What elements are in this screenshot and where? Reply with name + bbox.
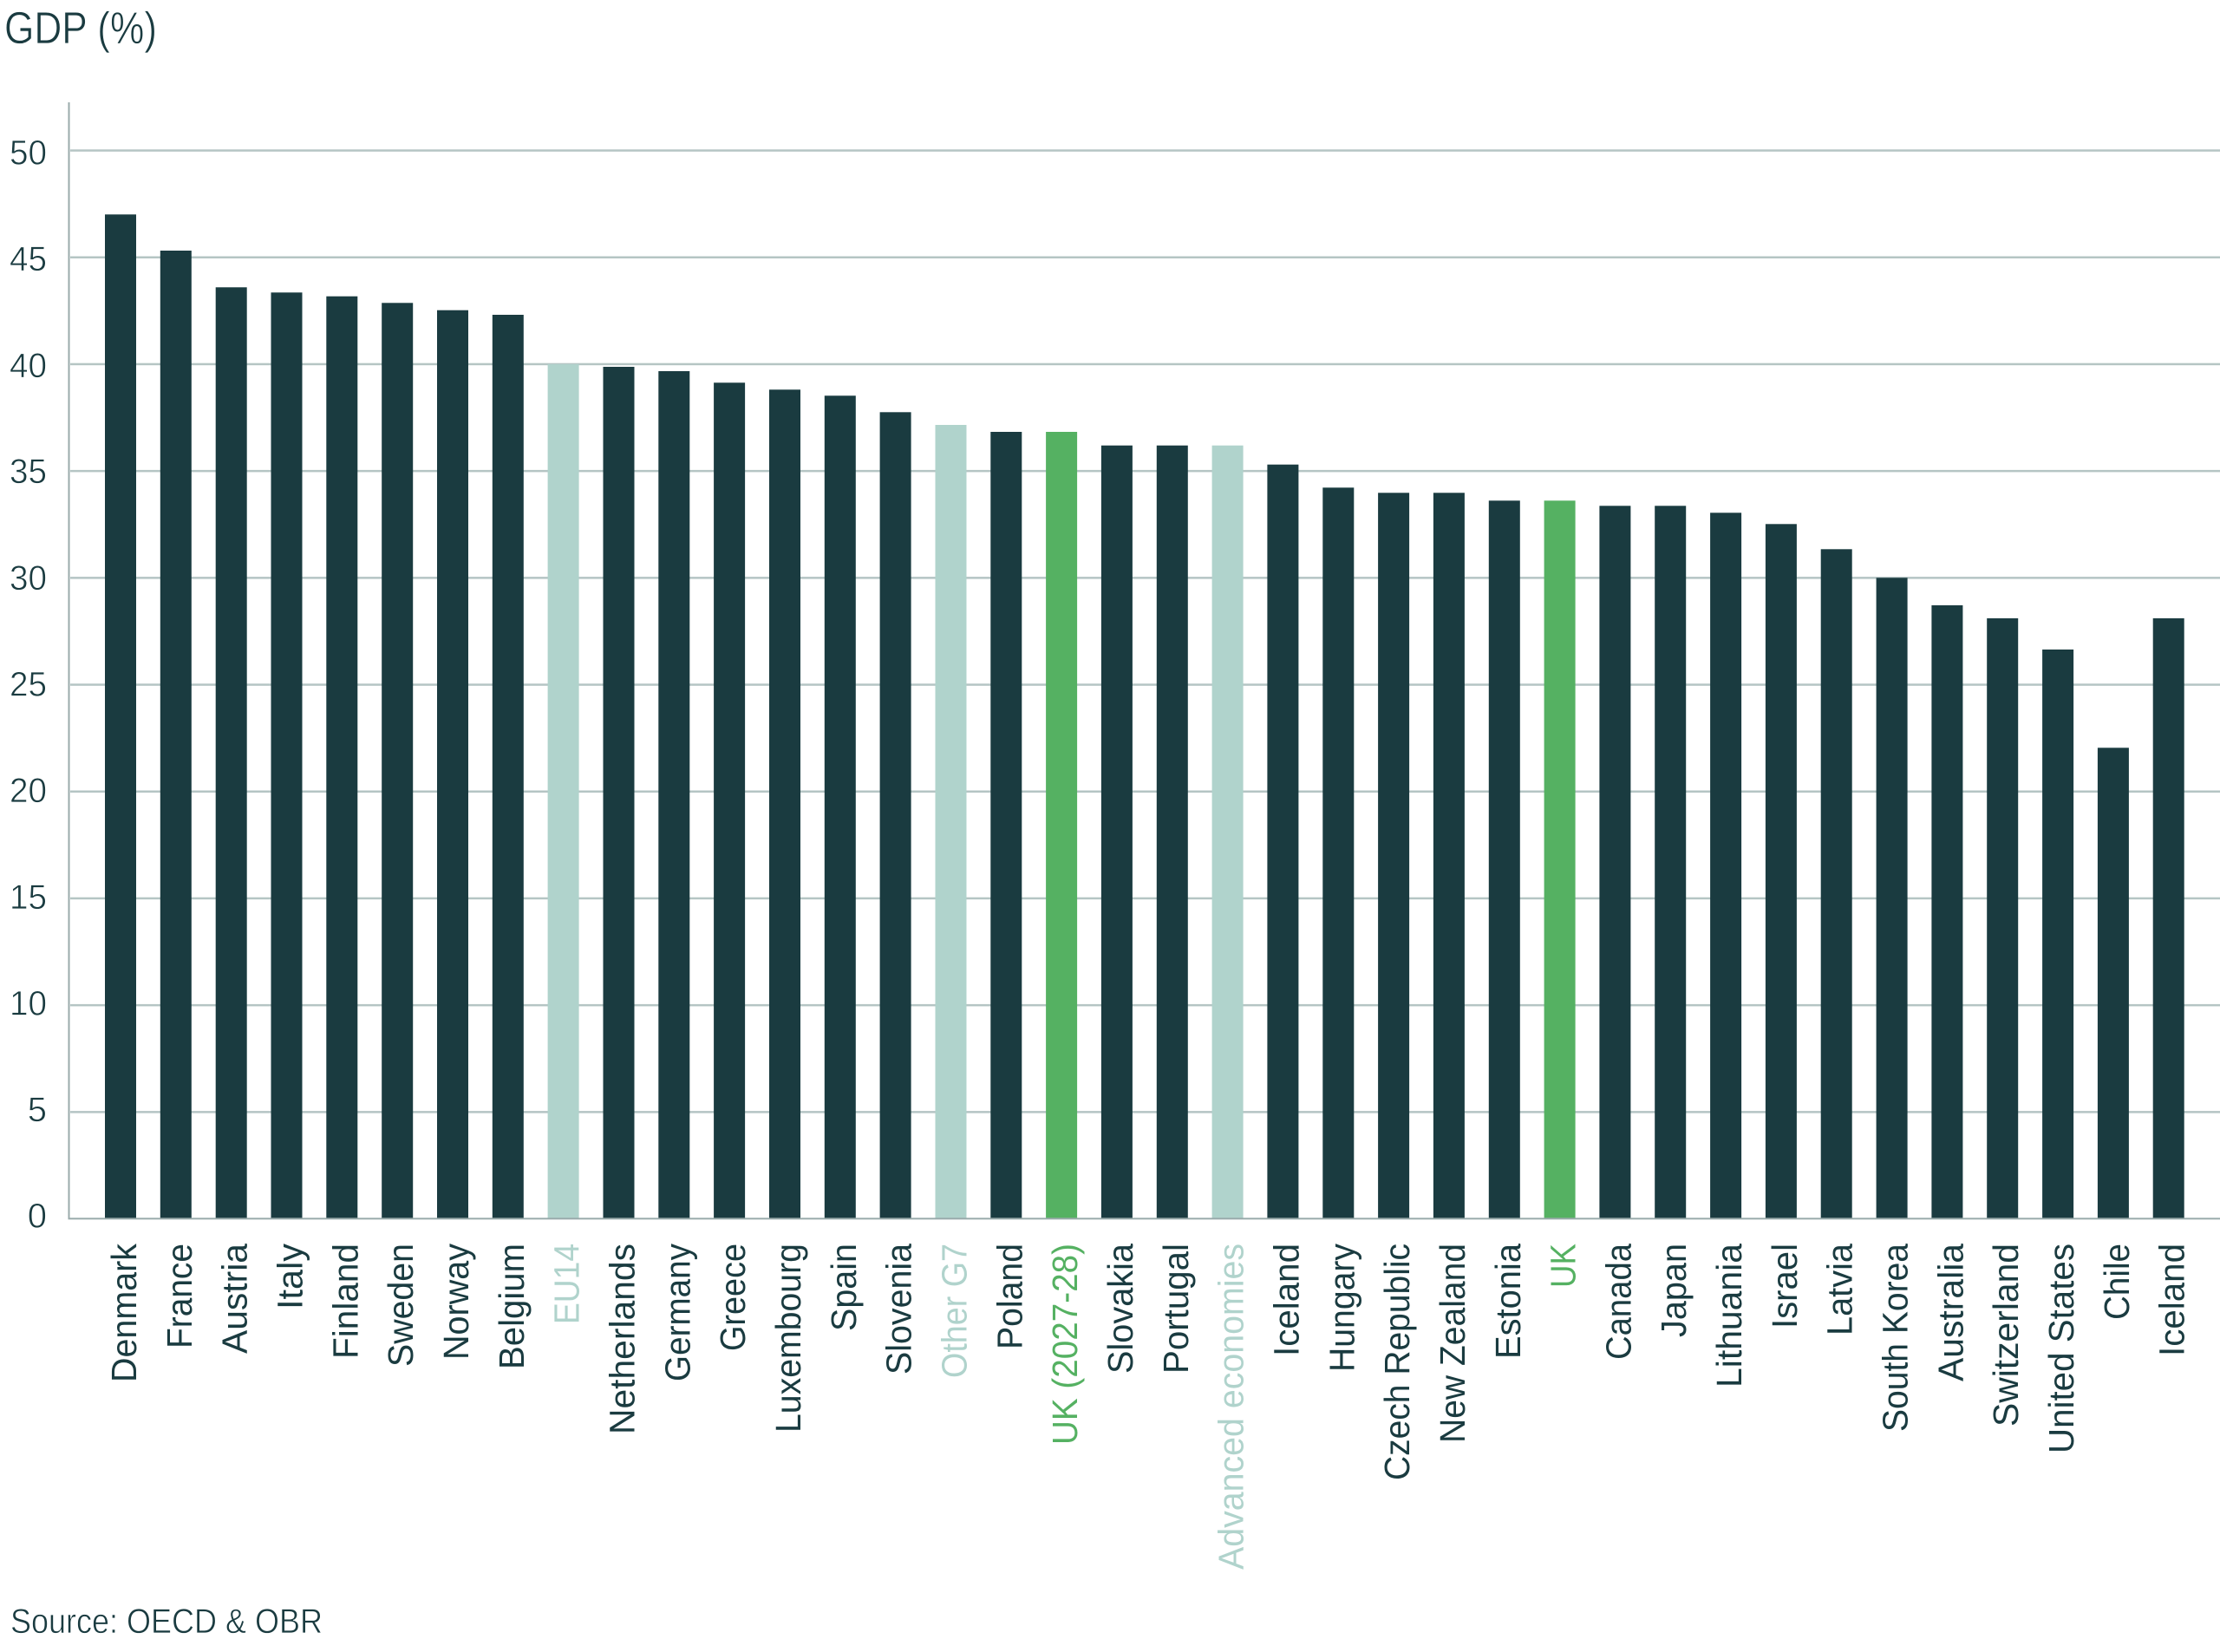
label: Norway: Norway: [436, 1244, 476, 1360]
label: Czech Republic: Czech Republic: [1377, 1244, 1417, 1480]
bar: South Korea: [1877, 578, 1908, 1218]
label: Finland: Finland: [325, 1244, 365, 1359]
tick 50: 50: [10, 134, 47, 172]
bar: Czech Republic: [1378, 493, 1409, 1218]
label: Advanced economies: Advanced economies: [1211, 1244, 1251, 1570]
bar: Slovenia: [880, 412, 911, 1218]
bar: Switzerland: [1987, 618, 2018, 1218]
source note: Source: OECD & OBR: [10, 1603, 323, 1641]
bar: Sweden: [382, 303, 413, 1218]
tick 20: 20: [10, 772, 47, 810]
bar: Iceland: [1267, 465, 1298, 1218]
bar: France: [160, 251, 192, 1218]
label: Belgium: Belgium: [492, 1244, 532, 1369]
bar: EU14: [548, 364, 579, 1218]
label: Iceland: Iceland: [1266, 1244, 1306, 1356]
label: Estonia: Estonia: [1488, 1244, 1528, 1359]
label: Spain: Spain: [824, 1244, 864, 1331]
label: Hungary: Hungary: [1322, 1244, 1361, 1372]
bar: Canada: [1599, 506, 1630, 1218]
bar: Spain: [825, 395, 856, 1218]
bar: UK: [1544, 500, 1576, 1218]
label: Chile: Chile: [2097, 1244, 2137, 1320]
bar: Iceland: [2153, 618, 2184, 1218]
label: France: France: [160, 1244, 199, 1348]
bar: Portugal: [1157, 446, 1188, 1218]
bar: Denmark: [105, 214, 136, 1218]
bars: [105, 214, 2184, 1218]
label: Israel: Israel: [1765, 1244, 1805, 1329]
tick 40: 40: [10, 347, 47, 385]
label: Japan: Japan: [1654, 1244, 1694, 1337]
label: UK: UK: [1544, 1244, 1583, 1288]
bar: Greece: [714, 382, 745, 1218]
bar: Israel: [1766, 524, 1797, 1218]
bar: Slovakia: [1101, 446, 1133, 1218]
bar: Australia: [1931, 605, 1962, 1218]
bar: Luxembourg: [769, 389, 800, 1218]
bar: Hungary: [1322, 487, 1354, 1218]
bar: Poland: [990, 432, 1022, 1218]
label: Netherlands: Netherlands: [602, 1244, 642, 1434]
title: GDP (%): GDP (%): [4, 3, 157, 54]
label: Austria: Austria: [215, 1244, 255, 1354]
label: Italy: Italy: [271, 1244, 310, 1309]
country labels: [104, 1244, 2192, 1570]
label: Slovenia: Slovenia: [879, 1244, 919, 1374]
label: UK (2027-28): UK (2027-28): [1045, 1244, 1085, 1445]
tick 10: 10: [10, 985, 47, 1023]
label: Iceland: Iceland: [2152, 1244, 2192, 1356]
bar: Belgium: [493, 315, 524, 1218]
label: Lithuania: Lithuania: [1709, 1244, 1749, 1388]
bar: Germany: [658, 371, 689, 1218]
tick 25: 25: [10, 666, 47, 704]
bar: Netherlands: [604, 367, 635, 1218]
label: EU14: EU14: [547, 1244, 587, 1324]
tick 15: 15: [10, 878, 47, 917]
bar: Norway: [437, 310, 468, 1218]
tick 30: 30: [10, 559, 47, 597]
bar: United States: [2042, 650, 2073, 1218]
label: Portugal: Portugal: [1156, 1244, 1196, 1374]
y axis tick labels: [10, 134, 47, 1235]
label: Australia: Australia: [1930, 1244, 1970, 1381]
label: Latvia: Latvia: [1820, 1244, 1860, 1335]
bar: Japan: [1655, 506, 1686, 1218]
label: Luxembourg: Luxembourg: [768, 1244, 808, 1433]
label: Denmark: Denmark: [104, 1244, 144, 1382]
bar: Other G7: [935, 425, 966, 1218]
label: Poland: Poland: [989, 1244, 1029, 1349]
label: Greece: Greece: [713, 1244, 753, 1351]
label: Switzerland: Switzerland: [1986, 1244, 2026, 1427]
bar: Finland: [326, 297, 357, 1218]
bar: Advanced economies: [1212, 446, 1244, 1218]
tick 5: 5: [28, 1091, 47, 1129]
tick 0: 0: [28, 1197, 47, 1235]
bar: UK (2027-28): [1046, 432, 1077, 1218]
bar: Austria: [216, 287, 247, 1218]
label: Other G7: Other G7: [935, 1244, 975, 1378]
label: Canada: Canada: [1598, 1244, 1638, 1360]
bar: Chile: [2098, 748, 2129, 1218]
bar: Estonia: [1489, 500, 1520, 1218]
bar: Italy: [271, 292, 302, 1218]
bar: Lithuania: [1710, 513, 1741, 1218]
label: Sweden: Sweden: [381, 1244, 421, 1367]
tick 45: 45: [10, 240, 47, 278]
label: South Korea: South Korea: [1876, 1244, 1916, 1432]
label: United States: United States: [2041, 1244, 2081, 1453]
label: Slovakia: Slovakia: [1100, 1244, 1140, 1374]
bar: Latvia: [1821, 549, 1852, 1218]
label: Germany: Germany: [657, 1244, 697, 1381]
tick 35: 35: [10, 453, 47, 491]
bar: New Zealand: [1433, 493, 1465, 1218]
label: New Zealand: New Zealand: [1433, 1244, 1472, 1443]
